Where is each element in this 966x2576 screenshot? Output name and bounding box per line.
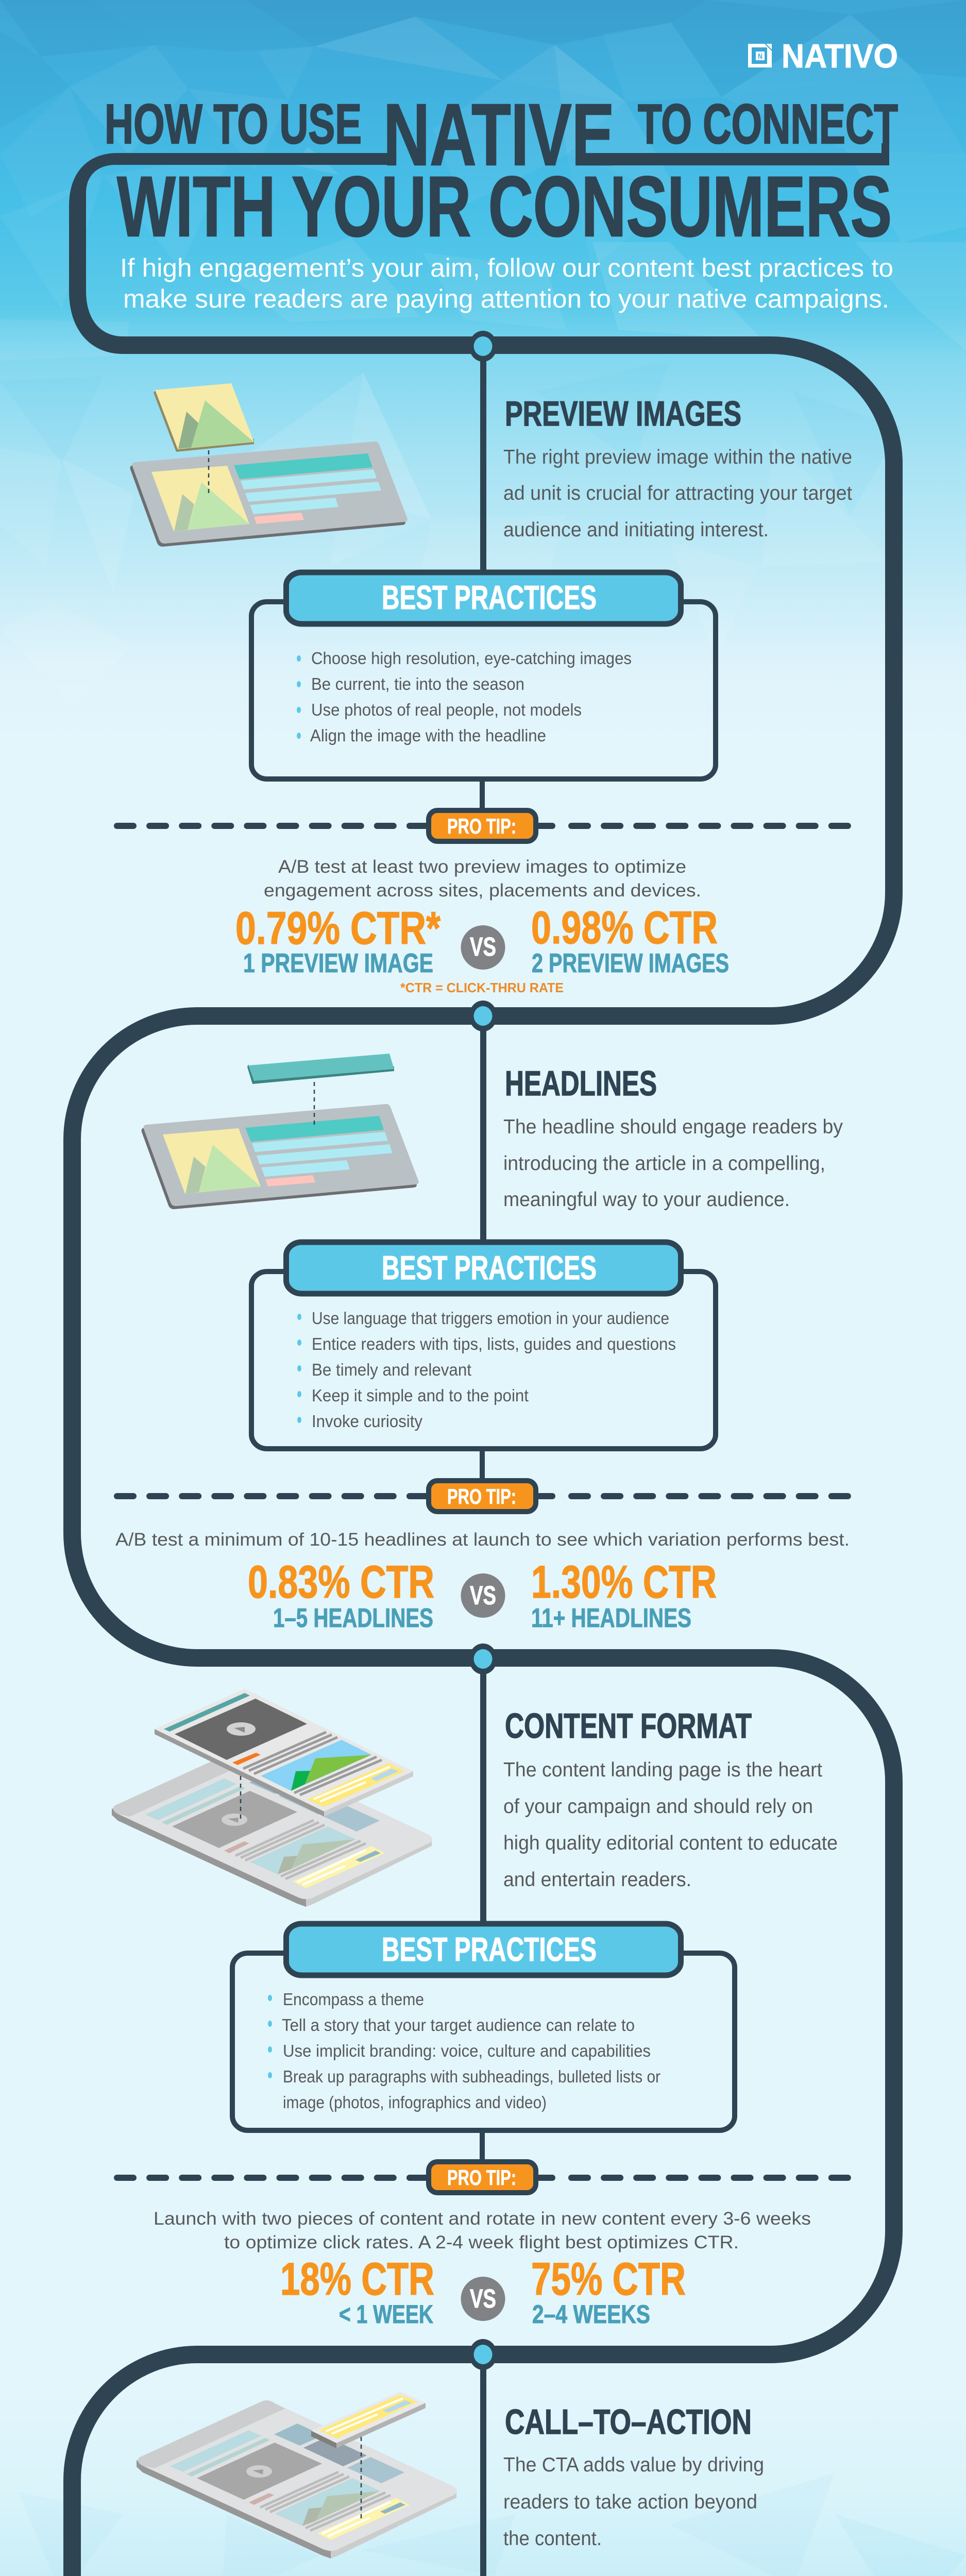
list: best practices	[268, 1990, 660, 2112]
title: NATIVE	[383, 86, 615, 184]
text: preview images description: audience and initiating interest.	[503, 519, 769, 541]
text: headlines description: meaningful way to your audience.	[503, 1189, 790, 1211]
text: pro tip 1: engagement across sites, placements and devices.	[264, 880, 701, 901]
pro tip 1: PRO TIP:	[447, 814, 516, 838]
stats comparison 2: 0.83% CTR	[248, 1556, 434, 1607]
text: content format description: The content landing page is the heart	[503, 1759, 822, 1781]
list: best practices: Use photos of real people, not models	[311, 700, 582, 719]
stats comparison 3	[280, 2253, 686, 2329]
list: best practices: Choose high resolution, eye-catching images	[311, 649, 632, 668]
text: pro tip 1	[264, 857, 701, 901]
stats comparison 1: VS	[470, 932, 496, 961]
text: headlines description: The headline should engage readers by	[503, 1116, 843, 1138]
subtitle: make sure readers are paying attention to your native campaigns.	[123, 284, 889, 313]
list: best practices	[297, 1309, 676, 1431]
text: pro tip 3: to optimize click rates. A 2-4 week flight best optimizes CTR.	[224, 2232, 739, 2252]
text: content format description	[503, 1759, 838, 1891]
logo: NATIVO: NATIVO	[782, 37, 898, 75]
node: section 3	[469, 1643, 497, 1674]
title: HOW TO USE	[105, 93, 362, 156]
list: best practices: Use language that triggers emotion in your audience	[312, 1309, 669, 1328]
stats comparison 3: VS	[470, 2284, 496, 2313]
stats comparison 3: < 1 WEEK	[339, 2300, 433, 2329]
text: call to action description: the content.	[503, 2528, 602, 2550]
subtitle: If high engagement’s your aim, follow our content best practices to	[120, 253, 893, 282]
pro tip 1	[117, 779, 849, 844]
logo: NATIVO: N	[758, 52, 762, 61]
list: best practices: Be timely and relevant	[312, 1360, 471, 1379]
pro tip 2	[117, 1450, 849, 1514]
title	[105, 86, 898, 255]
illustration: headline ad unit	[142, 1054, 419, 1209]
list: best practices: Encompass a theme	[283, 1990, 424, 2009]
list: best practices: Entice readers with tips, lists, guides and questions	[312, 1334, 676, 1353]
header: best practices: BEST PRACTICES	[382, 1249, 597, 1286]
illustration: call to action page	[137, 2392, 457, 2558]
heading: call to action: CALL–TO–ACTION	[505, 2402, 752, 2442]
header: best practices	[286, 1242, 681, 1294]
stats comparison 1: 2 PREVIEW IMAGES	[532, 948, 729, 978]
text: pro tip 3: Launch with two pieces of content and rotate in new content every 3-6 weeks	[154, 2209, 811, 2229]
text: pro tip 2: A/B test a minimum of 10-15 headlines at launch to see which variation performs best.	[115, 1530, 850, 1550]
text: call to action description: readers to take action beyond	[503, 2491, 757, 2513]
pro tip 3: PRO TIP:	[447, 2165, 516, 2190]
heading: content format: CONTENT FORMAT	[505, 1706, 752, 1745]
header: best practices: BEST PRACTICES	[382, 1930, 597, 1968]
stats comparison 3: 75% CTR	[531, 2253, 686, 2304]
pro tip 2: PRO TIP:	[447, 1484, 516, 1509]
text: headlines description: introducing the article in a compelling,	[503, 1153, 825, 1175]
header: best practices: BEST PRACTICES	[382, 579, 597, 616]
text: content format description: and entertain readers.	[503, 1869, 691, 1891]
list: best practices: Invoke curiosity	[312, 1412, 422, 1431]
stats comparison 2: 11+ HEADLINES	[531, 1603, 691, 1633]
text: headlines description	[503, 1116, 843, 1211]
heading: headlines: HEADLINES	[505, 1064, 657, 1103]
text: call to action description	[503, 2454, 764, 2550]
text: preview images description: The right preview image within the native	[503, 446, 852, 468]
list: best practices: Tell a story that your target audience can relate to	[282, 2015, 635, 2035]
panel: best practices 3	[232, 1924, 735, 2130]
footnote: CTR definition: *CTR = CLICK-THRU RATE	[400, 980, 564, 995]
header: best practices	[286, 1924, 681, 1975]
list: best practices: Align the image with the headline	[310, 726, 546, 745]
stats comparison 1: 1 PREVIEW IMAGE	[243, 948, 433, 978]
stats comparison 2: 1.30% CTR	[531, 1556, 717, 1607]
stats comparison 2: 1–5 HEADLINES	[273, 1603, 433, 1633]
list: best practices: Keep it simple and to the point	[312, 1386, 529, 1405]
text: preview images description	[503, 446, 852, 541]
text: call to action description: The CTA adds value by driving	[503, 2454, 764, 2476]
text: content format description: of your campaign and should rely on	[503, 1795, 813, 1818]
stats comparison 3: 18% CTR	[280, 2253, 434, 2304]
heading: preview images: PREVIEW IMAGES	[505, 394, 741, 433]
node: section 2	[469, 1001, 497, 1031]
stats comparison 1: 0.79% CTR*	[235, 902, 440, 954]
stats comparison 2	[248, 1556, 717, 1633]
stats comparison 2: VS	[470, 1581, 496, 1610]
node: section 4	[469, 2339, 497, 2370]
header: best practices	[286, 572, 681, 624]
list: best practices: image (photos, infographics and video)	[283, 2093, 547, 2112]
text: preview images description: ad unit is crucial for attracting your target	[503, 482, 852, 504]
stats comparison 3: 2–4 WEEKS	[532, 2300, 650, 2329]
list: best practices	[297, 649, 632, 745]
text: content format description: high quality editorial content to educate	[503, 1832, 838, 1854]
panel: best practices 2	[251, 1242, 716, 1449]
node: section 1	[469, 331, 497, 362]
text: pro tip 3	[154, 2209, 811, 2252]
text: pro tip 1: A/B test at least two preview images to optimize	[278, 857, 686, 877]
list: best practices: Be current, tie into the season	[311, 674, 524, 693]
stats comparison 1: 0.98% CTR	[531, 902, 718, 953]
pro tip 3	[117, 2131, 849, 2195]
panel: best practices 1	[251, 572, 716, 779]
illustration: content format page	[112, 1689, 432, 1907]
list: best practices: Use implicit branding: voice, culture and capabilities	[283, 2041, 651, 2060]
stats comparison 1	[235, 902, 729, 978]
list: best practices: Break up paragraphs with subheadings, bulleted lists or	[283, 2067, 660, 2086]
illustration: preview image ad unit	[130, 383, 408, 547]
subtitle	[120, 253, 893, 313]
